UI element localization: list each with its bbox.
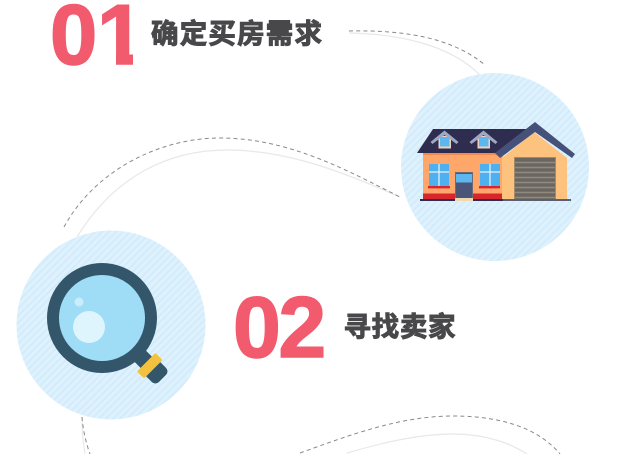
gable roof [495, 122, 575, 158]
heading: step 2: 寻找卖家 [344, 311, 456, 342]
lens highlights [73, 298, 105, 343]
lens [53, 269, 151, 367]
step number 01 [52, 4, 133, 66]
connector: toward next step [300, 416, 560, 454]
left dormer [430, 130, 458, 148]
connector: magnifier downward [82, 417, 90, 454]
connector: house to magnifier [64, 138, 400, 237]
step number 02: 02 [233, 280, 324, 376]
icon: house in circle [401, 73, 589, 261]
right dormer [470, 130, 498, 148]
left window [428, 164, 450, 188]
ground line [420, 199, 571, 201]
main roof [417, 129, 527, 153]
front door [455, 172, 473, 201]
red base [423, 194, 503, 199]
heading: step 1: 确定买房需求 [151, 18, 322, 49]
garage wall [502, 132, 567, 199]
main wall [423, 153, 503, 194]
icon: magnifier in circle [16, 230, 206, 420]
right window [479, 164, 500, 188]
garage door [514, 157, 556, 201]
handle [130, 346, 172, 388]
connector: 01 to house [349, 31, 485, 75]
